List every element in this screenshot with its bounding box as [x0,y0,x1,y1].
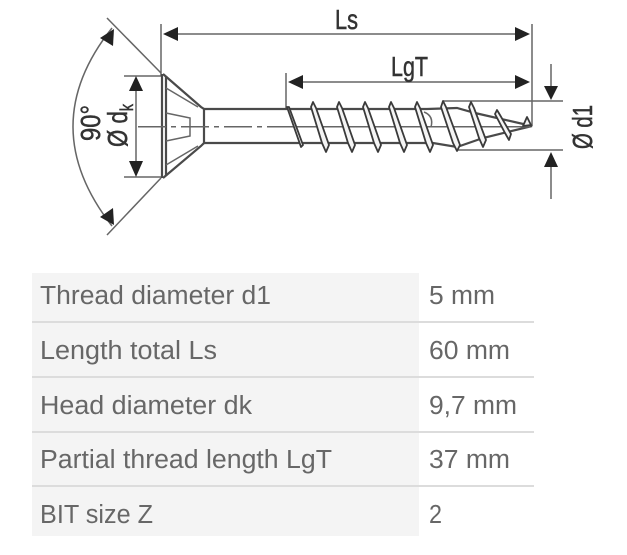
dimension head diameter dk: Ø d [102,102,133,147]
dimension thread diameter d1 [443,64,598,199]
row: length total: 60 mm [429,337,510,365]
row: partial thread length: Partial thread length LgT [40,446,332,474]
row: head diameter [40,392,517,420]
dimension 90 degree head angle: 90° [75,105,106,141]
row: partial thread length: 37 mm [429,446,510,474]
row: bit size: 2 [429,501,442,529]
dimension head diameter dk [102,76,161,177]
row: head diameter: Head diameter dk [40,392,252,420]
row: thread diameter: Thread diameter d1 [40,282,271,310]
row: bit size [40,501,442,529]
dimension thread diameter d1: Ø d1 [567,105,598,149]
specifications table [32,273,534,536]
row dividers [32,321,534,487]
dimension LgT: thread length: LgT [391,51,428,82]
dimension 90 degree head angle [73,18,161,235]
row: length total [40,337,510,365]
screw head [162,74,204,178]
row: thread diameter [40,282,495,310]
screw shank and centre line [138,108,532,147]
row: thread diameter: 5 mm [429,282,495,310]
row: partial thread length [40,446,510,474]
dimension LgT: thread length [286,51,530,108]
screw technical drawing [73,4,598,235]
dimension Ls: total length: Ls [335,4,358,35]
dimension Ls: total length [161,4,532,126]
screw thread [287,101,531,152]
row: length total: Length total Ls [40,337,217,365]
row: head diameter: 9,7 mm [429,392,517,420]
dimension head diameter dk: k [117,103,137,111]
row: bit size: BIT size Z [40,501,153,529]
label column background [32,273,419,536]
